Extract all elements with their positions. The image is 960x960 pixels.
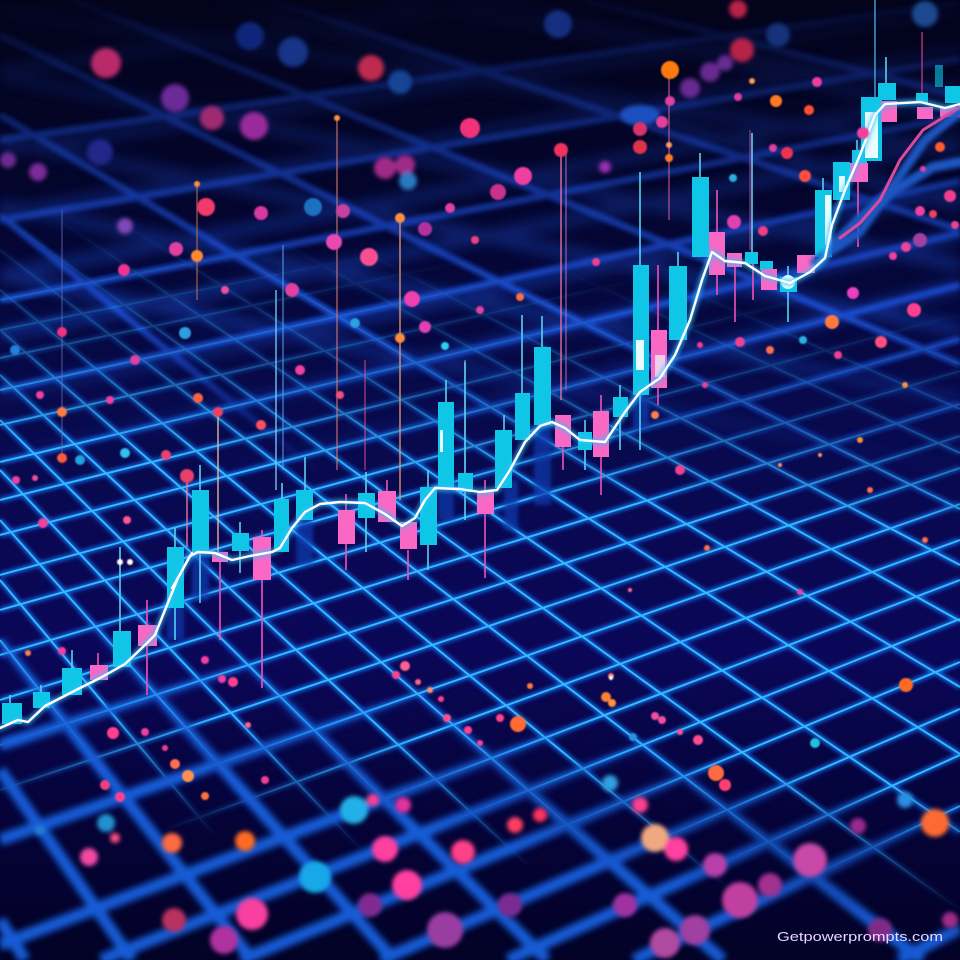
large out-of-focus dots in the foreground	[35, 775, 958, 958]
out-of-focus foreground grid	[0, 626, 960, 960]
blurred bokeh dots at the top	[0, 0, 938, 234]
in-focus neon grid	[0, 232, 960, 906]
white highlights inside the candles	[440, 112, 878, 452]
tall signal lines	[62, 0, 922, 552]
out-of-focus upper grid	[0, 0, 960, 466]
cyan candles (rising)	[2, 65, 960, 724]
watermark: Getpowerprompts.com	[777, 929, 943, 944]
candle wicks	[10, 57, 886, 703]
moving-average curves at the top right	[815, 107, 960, 262]
blurred far grid at the top	[0, 14, 960, 441]
reflections under the candles	[167, 390, 649, 640]
pink candles (falling)	[90, 101, 960, 680]
small glowing data points across the mid ground	[10, 61, 959, 802]
white price line	[0, 102, 960, 728]
